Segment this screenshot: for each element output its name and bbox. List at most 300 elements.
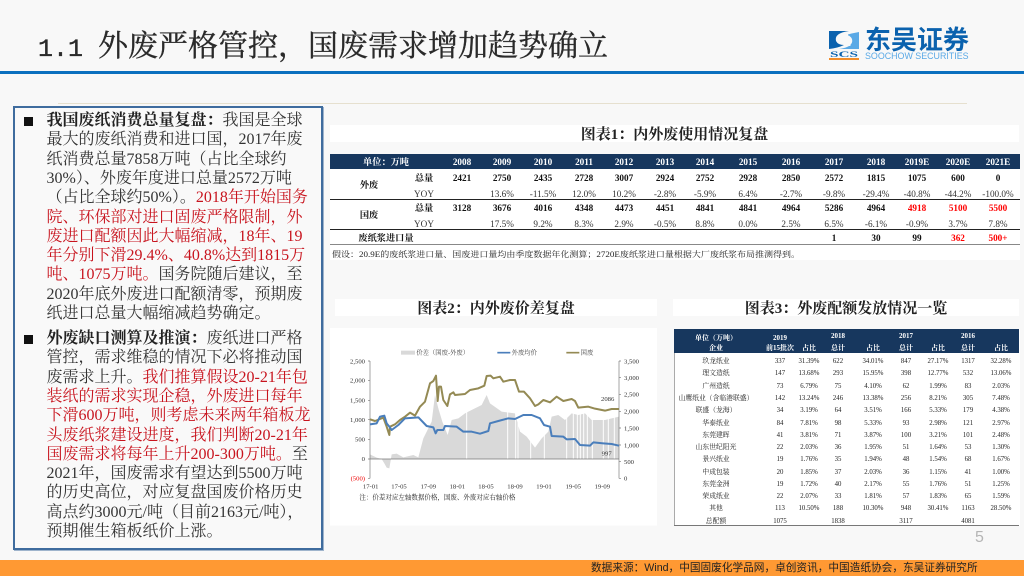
- source note: 数据来源：Wind，中国固废化学品网，卓创资讯，中国造纸协会，东吴证券研究所: [591, 562, 978, 574]
- text block: waste paper consumption review: （占比全球约50%）。2018年开始国务: [46, 189, 308, 206]
- table: domestic and imported waste usage: 2015: [739, 157, 758, 167]
- table: domestic and imported waste usage: 2.9%: [614, 219, 634, 229]
- axis labels: [350, 358, 640, 503]
- table: domestic and imported waste usage: 4841: [739, 203, 758, 213]
- table: import quota allocation: 3.87%: [864, 432, 882, 439]
- table: domestic and imported waste usage: 2011: [575, 157, 593, 167]
- table: domestic and imported waste usage: 总量: [415, 202, 433, 213]
- table: import quota allocation: 41: [965, 469, 971, 476]
- table: import quota allocation: 32.28%: [991, 358, 1012, 365]
- table: domestic and imported waste usage: 8.8%: [695, 219, 715, 229]
- table: import quota allocation: 27.17%: [928, 358, 949, 365]
- chart: domestic vs imported price spread: [350, 348, 640, 503]
- text block: import gap estimate: 装纸的需求实现企稳，外废进口每年: [46, 388, 303, 405]
- table: import quota allocation: 53: [965, 444, 972, 451]
- table: domestic and imported waste usage: 2435: [534, 173, 553, 183]
- table: import quota allocation: 中成包装: [702, 467, 730, 476]
- axis labels: 1,500: [350, 397, 366, 404]
- title: 1.1 外废严格管控，国废需求增加趋势确立: [38, 30, 608, 64]
- table: import quota allocation: 山东世纪阳光: [696, 442, 737, 451]
- table: import quota allocation: 7.48%: [992, 395, 1010, 402]
- axis labels: 18-01: [450, 483, 465, 490]
- table: import quota allocation: 1.67%: [992, 456, 1010, 463]
- table: import quota allocation: 31.39%: [799, 358, 820, 365]
- axis labels: 0: [362, 456, 366, 463]
- table: domestic and imported waste usage: YOY: [414, 219, 434, 229]
- table: domestic and imported waste usage: 9.2%: [533, 219, 553, 229]
- axis labels: 18-05: [478, 483, 494, 490]
- table: domestic and imported waste usage: 单位：万吨: [363, 156, 410, 167]
- table: import quota allocation: 1.72%: [800, 481, 818, 488]
- table: import quota allocation: 13.24%: [799, 395, 820, 402]
- table: import quota allocation: [674, 329, 1019, 526]
- table: import quota allocation: 305: [963, 395, 974, 402]
- text block: waste paper consumption review: 2020年底外废进口配额清零，预期废: [46, 286, 303, 303]
- table: domestic and imported waste usage: 2013: [656, 157, 675, 167]
- table: domestic and imported waste usage: 3.7%: [948, 219, 968, 229]
- panel: commentary text: [13, 106, 323, 550]
- table: domestic and imported waste usage: -29.4%: [863, 189, 890, 199]
- table: domestic and imported waste usage: -11.5%: [530, 189, 557, 199]
- text block: import gap estimate: 高点约3000元/吨（目前2163元/吨），: [46, 504, 303, 521]
- table: import quota allocation: 1.76%: [800, 456, 818, 463]
- axis labels: 1,000: [350, 417, 366, 424]
- table: import quota allocation: 占比: [866, 343, 880, 352]
- page number: 5: [975, 529, 984, 546]
- table: domestic and imported waste usage: 外废: [360, 179, 378, 190]
- table: import quota allocation: 84: [777, 420, 784, 427]
- table: import quota allocation: 93: [903, 420, 910, 427]
- table: domestic and imported waste usage: 17.5%: [490, 219, 514, 229]
- table: import quota allocation: 占比: [802, 343, 816, 352]
- axis labels: 2,000: [350, 378, 366, 385]
- table: import quota allocation: 总计: [961, 343, 975, 352]
- table: domestic and imported waste usage: -44.2%: [945, 189, 972, 199]
- legend: 国废: [581, 348, 594, 357]
- bullet 2: [24, 335, 33, 344]
- table: domestic and imported waste usage: 2572: [825, 173, 844, 183]
- table: import quota allocation: 622: [833, 358, 844, 365]
- table: domestic and imported waste usage: 8.3%: [574, 219, 594, 229]
- spread area: [370, 395, 619, 468]
- heading: chart 1: [330, 125, 1019, 142]
- heading: chart 2: 图表2：内外废价差复盘: [417, 301, 575, 317]
- axis labels: 注：价差对应左轴数据价格，国废、外废对应右轴价格: [359, 493, 516, 503]
- table: import quota allocation: 64: [835, 407, 842, 414]
- table: domestic and imported waste usage: 2019E: [905, 157, 929, 167]
- table: domestic and imported waste usage: 2009: [493, 157, 512, 167]
- table: import quota allocation: 1.76%: [929, 481, 947, 488]
- table: import quota allocation: 20: [777, 469, 784, 476]
- table: import quota allocation: 13.06%: [991, 370, 1012, 377]
- table: import quota allocation: 166: [901, 407, 912, 414]
- table: import quota allocation: 13.38%: [863, 395, 884, 402]
- table: import quota allocation: 15.95%: [863, 370, 884, 377]
- table: domestic and imported waste usage: 362: [951, 233, 965, 243]
- line: domestic waste price: [370, 376, 619, 435]
- table: import quota allocation: 山鹰纸业（含临港联盛）: [679, 393, 753, 402]
- table: import quota allocation: 101: [963, 432, 973, 439]
- table: import quota allocation: 3.51%: [864, 407, 882, 414]
- header rule: [0, 71, 1024, 74]
- table: domestic and imported waste usage: 2016: [782, 157, 801, 167]
- axis labels: 3,500: [624, 358, 640, 365]
- table: domestic and imported waste usage: 4918: [908, 203, 927, 213]
- table: import quota allocation: 3117: [899, 518, 913, 525]
- axis labels: 17-01: [363, 483, 378, 490]
- table: import quota allocation: 3.19%: [800, 407, 818, 414]
- text block: import gap estimate: 外废缺口测算及推演：废纸进口严格: [46, 330, 303, 347]
- heading: chart 3: 图表3：外废配额发放情况一览: [745, 301, 947, 317]
- table: domestic and imported waste usage: 2928: [739, 173, 758, 183]
- table: domestic and imported waste usage: -5.9%: [694, 189, 716, 199]
- axis labels: 18-09: [507, 483, 523, 490]
- table: domestic and imported waste usage: -0.9%: [906, 219, 928, 229]
- table: domestic and imported waste usage: 1815: [867, 173, 886, 183]
- table: import quota allocation: 55: [903, 481, 910, 488]
- table: import quota allocation: 3.81%: [800, 432, 818, 439]
- text block: waste paper consumption review: 吨、1075万吨。国务院随后建议，至: [46, 266, 303, 283]
- table: import quota allocation: 1.30%: [992, 444, 1010, 451]
- table: import quota allocation: 10.50%: [799, 505, 820, 512]
- axis labels: 0: [624, 476, 628, 483]
- table: domestic and imported waste usage: 10.2%: [612, 189, 636, 199]
- text block: waste paper consumption review: 纸进口总量大幅缩减趋势确定。: [46, 305, 271, 322]
- table: import quota allocation: 广州造纸: [702, 381, 730, 390]
- table: domestic and imported waste usage: 3128: [453, 203, 472, 213]
- table: domestic and imported waste usage: 5500: [989, 203, 1008, 213]
- table: import quota allocation: 36: [903, 469, 910, 476]
- table: import quota allocation: 3.21%: [929, 432, 947, 439]
- table: import quota allocation: 2.97%: [992, 420, 1010, 427]
- text block: import gap estimate: 管控，需求维稳的情况下必将推动国: [46, 349, 303, 366]
- table: domestic and imported waste usage: 13.6%: [490, 189, 514, 199]
- text block: waste paper consumption review: 最大的废纸消费和进口国，2017年废: [46, 131, 303, 148]
- table: import quota allocation: 玖龙纸业: [702, 356, 730, 365]
- heading: chart 3: [673, 299, 1019, 316]
- table: import quota allocation: 企业: [709, 343, 723, 352]
- table: domestic and imported waste usage: 99: [912, 233, 922, 243]
- legend: [401, 348, 594, 357]
- table: domestic and imported waste usage: 30: [871, 233, 881, 243]
- axis labels: 2,500: [350, 358, 366, 365]
- text block: import gap estimate: 2021年，国废需求有望达到5500万吨: [46, 465, 303, 482]
- table: import quota allocation: 1.83%: [929, 493, 947, 500]
- heading: chart 1: 图表1：内外废使用情况复盘: [581, 127, 768, 143]
- table: import quota allocation: 4081: [961, 518, 975, 525]
- table: domestic and imported waste usage: 3007: [615, 173, 634, 183]
- text block: import gap estimate: 头废纸浆建设进度，我们判断20-21年: [46, 426, 308, 444]
- table: import quota allocation: 8.21%: [929, 395, 947, 402]
- logo: Soochow Securities: [829, 25, 969, 61]
- table: domestic and imported waste usage: 4473: [615, 203, 634, 213]
- axis labels: 17-09: [421, 483, 437, 490]
- table: import quota allocation: 65: [965, 493, 972, 500]
- table: import quota allocation: 6.79%: [800, 383, 818, 390]
- text block: import gap estimate: 废需求上升。我们推算假设20-21年包: [46, 369, 308, 386]
- text block: import gap estimate: 的历史高位，对应复盘国废价格历史: [46, 484, 303, 501]
- axis labels: 500: [355, 436, 366, 443]
- table: import quota allocation: 41: [777, 432, 783, 439]
- table: import quota allocation: 1075: [773, 518, 787, 525]
- table: domestic and imported waste usage: 废纸浆进口量: [358, 232, 414, 243]
- table: import quota allocation: 4.10%: [864, 383, 882, 390]
- table: import quota allocation: 总计: [899, 343, 913, 352]
- axis labels: 17-05: [391, 483, 407, 490]
- text block: import gap estimate: 国废需求将每年上升200-300万吨。至: [46, 446, 308, 463]
- legend: 价差（国废-外废）: [416, 348, 469, 357]
- table: domestic and imported waste usage: YOY: [414, 189, 434, 199]
- table: import quota allocation: 联盛（龙海）: [696, 405, 736, 414]
- table: import quota allocation: 246: [833, 395, 844, 402]
- table: import quota allocation: 1.81%: [864, 493, 882, 500]
- table: domestic and imported waste usage: 2752: [696, 173, 715, 183]
- table: import quota allocation: 东莞金洲: [702, 479, 730, 488]
- axis labels: 1,000: [624, 442, 640, 449]
- table: domestic and imported waste usage: 国废: [360, 209, 378, 220]
- table: import quota allocation: 34: [777, 407, 784, 414]
- table: import quota allocation: 理文造纸: [702, 368, 730, 377]
- axis labels: 1,500: [624, 425, 640, 432]
- table: import quota allocation: 总配额: [706, 516, 726, 525]
- table: domestic and imported waste usage: 0.0%: [738, 219, 758, 229]
- table: domestic and imported waste usage: -6.1%: [865, 219, 887, 229]
- table: domestic and imported waste usage: 2012: [615, 157, 634, 167]
- text block: waste paper consumption review: 纸消费总量7858万吨（占比全球约: [46, 151, 287, 168]
- table: import quota allocation: 2.03%: [800, 444, 818, 451]
- table: import quota allocation: 532: [963, 370, 974, 377]
- table: domestic and imported waste usage: 假设：20.9E的废纸浆进口量、国废进口量均由季度数据年化测算；2720E废纸浆进口量根据大厂废纸浆布局推测得到。: [332, 249, 800, 259]
- table: import quota allocation: 36: [835, 444, 842, 451]
- table: domestic and imported waste usage: 2017: [825, 157, 844, 167]
- table: domestic and imported waste usage: -9.8%: [823, 189, 845, 199]
- table: import quota allocation: 35: [835, 456, 842, 463]
- table: import quota allocation: 179: [963, 407, 974, 414]
- table: import quota allocation: 占比: [931, 343, 945, 352]
- table: domestic and imported waste usage: -100.0%: [982, 189, 1014, 199]
- table: domestic and imported waste usage: 4348: [575, 203, 594, 213]
- table: import quota allocation: 荣成纸业: [702, 491, 730, 500]
- table: import quota allocation: 2.48%: [992, 432, 1010, 439]
- table: import quota allocation: 73: [777, 383, 784, 390]
- table: import quota allocation: 2.03%: [864, 469, 882, 476]
- table: domestic and imported waste usage: 2014: [696, 157, 715, 167]
- table: domestic and imported waste usage: -0.5%: [654, 219, 676, 229]
- table: import quota allocation: 7.81%: [800, 420, 818, 427]
- table: import quota allocation: 1.59%: [992, 493, 1010, 500]
- table: domestic and imported waste usage: 2728: [575, 173, 594, 183]
- axis labels: 19-01: [536, 483, 552, 490]
- legend: 外废均价: [512, 348, 538, 357]
- table: import quota allocation: 2.98%: [929, 420, 947, 427]
- table: domestic and imported waste usage: 2020E: [946, 157, 970, 167]
- table: import quota allocation: 4.38%: [992, 407, 1010, 414]
- table: import quota allocation: 2.03%: [992, 383, 1010, 390]
- table: import quota allocation: 113: [775, 505, 786, 512]
- table: import quota allocation: 2017: [899, 332, 914, 340]
- table: domestic and imported waste usage: 2008: [453, 157, 472, 167]
- table: import quota allocation: 景兴纸业: [702, 454, 730, 463]
- table: import quota allocation: 5.33%: [929, 407, 947, 414]
- table: domestic and imported waste usage: 6.4%: [738, 189, 758, 199]
- table: import quota allocation: 62: [903, 383, 910, 390]
- table: import quota allocation: 83: [965, 383, 972, 390]
- table: domestic and imported waste usage: -2.7%: [780, 189, 802, 199]
- bullet 1: [24, 117, 33, 126]
- table: domestic and imported waste usage: 0: [996, 173, 1001, 183]
- table: domestic and imported waste usage: 3676: [493, 203, 512, 213]
- table: import quota allocation: 33: [835, 493, 842, 500]
- table: import quota allocation: 398: [901, 370, 912, 377]
- table: import quota allocation: 19: [777, 456, 784, 463]
- table: import quota allocation: 1.54%: [929, 456, 947, 463]
- text block: waste paper consumption review: 年分别下滑29.4%、40.8%达到1815万: [46, 247, 305, 264]
- text block: waste paper consumption review: 30%）、外废年度进口总量2572万吨: [46, 170, 292, 187]
- axes: [368, 361, 621, 478]
- table: import quota allocation: 147: [775, 370, 786, 377]
- table: import quota allocation: 34.01%: [863, 358, 884, 365]
- table: domestic and imported waste usage: 4016: [534, 203, 553, 213]
- table: import quota allocation: 28.50%: [991, 505, 1012, 512]
- table: import quota allocation: 东莞建晖: [702, 430, 730, 439]
- table: import quota allocation: 前15批次: [766, 343, 794, 352]
- table: import quota allocation: 142: [775, 395, 786, 402]
- table: import quota allocation: 总计: [831, 343, 845, 352]
- table: domestic and imported waste usage: [330, 154, 1020, 259]
- table: domestic and imported waste usage: 5286: [825, 203, 844, 213]
- table: import quota allocation: 948: [901, 505, 912, 512]
- table: import quota allocation: 293: [833, 370, 844, 377]
- text block: import gap estimate: 下滑600万吨，则考虑未来两年箱板龙: [46, 407, 311, 424]
- table: import quota allocation: 1.00%: [992, 469, 1010, 476]
- text block: waste paper consumption review: [46, 111, 308, 322]
- table: import quota allocation: 2.17%: [864, 481, 882, 488]
- table: import quota allocation: 1.94%: [864, 456, 882, 463]
- table: domestic and imported waste usage: 4841: [696, 203, 715, 213]
- table: domestic and imported waste usage: 1075: [908, 173, 927, 183]
- text block: waste paper consumption review: 废进口配额因此大幅缩减，18年、19: [46, 228, 303, 245]
- table: import quota allocation: 51: [965, 481, 971, 488]
- table: import quota allocation: 19: [777, 481, 784, 488]
- table: import quota allocation: 98: [835, 420, 842, 427]
- table: import quota allocation: 12.77%: [928, 370, 949, 377]
- table: import quota allocation: 1.95%: [864, 444, 882, 451]
- text block: waste paper consumption review: 我国废纸消费总量复盘：我国是全球: [46, 112, 303, 129]
- table: import quota allocation: 71: [835, 432, 841, 439]
- table: import quota allocation: 1163: [961, 505, 975, 512]
- table: import quota allocation: 1.85%: [800, 469, 818, 476]
- table: import quota allocation: 37: [835, 469, 842, 476]
- table: import quota allocation: 1.15%: [929, 469, 947, 476]
- text block: import gap estimate: 预期催生箱板纸价上涨。: [46, 523, 223, 540]
- table: import quota allocation: 10.30%: [863, 505, 884, 512]
- icon: logo mark: [829, 31, 859, 60]
- table: import quota allocation: 337: [775, 358, 786, 365]
- table: import quota allocation: 单位（万吨）: [695, 333, 737, 342]
- table: import quota allocation: 40: [835, 481, 842, 488]
- table: import quota allocation: 1317: [961, 358, 975, 365]
- axis labels: 500: [624, 459, 635, 466]
- text block: waste paper consumption review: 院、环保部对进口固废严格限制，外: [46, 208, 303, 226]
- table: import quota allocation: 48: [903, 456, 910, 463]
- table: import quota allocation: 68: [965, 456, 972, 463]
- line: imported waste price: [370, 415, 619, 446]
- table: domestic and imported waste usage: 12.0%: [572, 189, 596, 199]
- table: domestic and imported waste usage: 总量: [415, 172, 433, 183]
- icon: logo mark: SCS: [830, 50, 859, 59]
- table: import quota allocation: 1838: [831, 518, 845, 525]
- footer bar: [0, 560, 1024, 576]
- table: import quota allocation: 121: [963, 420, 973, 427]
- table: import quota allocation: 其他: [709, 503, 723, 512]
- table: domestic and imported waste usage: 600: [951, 173, 965, 183]
- table: import quota allocation: 5.33%: [864, 420, 882, 427]
- table: domestic and imported waste usage: 2750: [493, 173, 512, 183]
- table: domestic and imported waste usage: 1: [832, 233, 837, 243]
- text block: import gap estimate: [46, 329, 311, 540]
- table: domestic and imported waste usage: 2421: [453, 173, 472, 183]
- axis labels: 19-05: [566, 483, 582, 490]
- table: import quota allocation: 100: [901, 432, 912, 439]
- beige divider: [58, 103, 967, 104]
- table: import quota allocation: 华泰纸业: [702, 418, 730, 427]
- table: domestic and imported waste usage: 2021E: [986, 157, 1010, 167]
- table: import quota allocation: 1.25%: [992, 481, 1010, 488]
- table: domestic and imported waste usage: 7.8%: [988, 219, 1008, 229]
- axis labels: (500): [351, 476, 365, 483]
- table: domestic and imported waste usage: -2.8%: [654, 189, 676, 199]
- table: import quota allocation: 1.99%: [929, 383, 947, 390]
- axis labels: 19-09: [595, 483, 611, 490]
- logo English name: SOOCHOW SECURITIES: [865, 51, 969, 61]
- table: domestic and imported waste usage: 2924: [656, 173, 675, 183]
- axis labels: 2,000: [624, 408, 640, 415]
- table: import quota allocation: 847: [901, 358, 912, 365]
- table: import quota allocation: 30.41%: [928, 505, 949, 512]
- table: import quota allocation: 占比: [994, 343, 1008, 352]
- table: import quota allocation: 2.07%: [800, 493, 818, 500]
- table: domestic and imported waste usage: 2.5%: [781, 219, 801, 229]
- table: domestic and imported waste usage: 2010: [534, 157, 553, 167]
- table: domestic and imported waste usage: 6.5%: [824, 219, 844, 229]
- table: import quota allocation: 75: [835, 383, 842, 390]
- table: import quota allocation: 22: [777, 444, 784, 451]
- table: domestic and imported waste usage: 2850: [782, 173, 801, 183]
- table: domestic and imported waste usage: 4964: [867, 203, 886, 213]
- table: domestic and imported waste usage: 4964: [782, 203, 801, 213]
- axis labels: 997: [602, 450, 612, 457]
- table: import quota allocation: 2016: [961, 332, 976, 340]
- table: import quota allocation: 13.68%: [799, 370, 820, 377]
- axis labels: 3,000: [624, 375, 640, 382]
- table: domestic and imported waste usage: 4451: [656, 203, 675, 213]
- table: import quota allocation: 188: [833, 505, 844, 512]
- table: import quota allocation: 1.64%: [929, 444, 947, 451]
- table: domestic and imported waste usage: 2018: [867, 157, 886, 167]
- axis labels: 2086: [601, 396, 615, 403]
- table: domestic and imported waste usage: -40.8%: [904, 189, 931, 199]
- table: domestic and imported waste usage: 500+: [988, 233, 1008, 243]
- table: import quota allocation: 22: [777, 493, 784, 500]
- table: import quota allocation: 256: [901, 395, 912, 402]
- table: domestic and imported waste usage: 5100: [949, 203, 968, 213]
- logo name: 东吴证券: [865, 25, 969, 55]
- axis labels: 2,500: [624, 391, 640, 398]
- table: import quota allocation: 57: [903, 493, 910, 500]
- table: import quota allocation: 2019: [773, 334, 788, 342]
- table: import quota allocation: 2018: [831, 332, 846, 340]
- heading: chart 2: [335, 299, 657, 316]
